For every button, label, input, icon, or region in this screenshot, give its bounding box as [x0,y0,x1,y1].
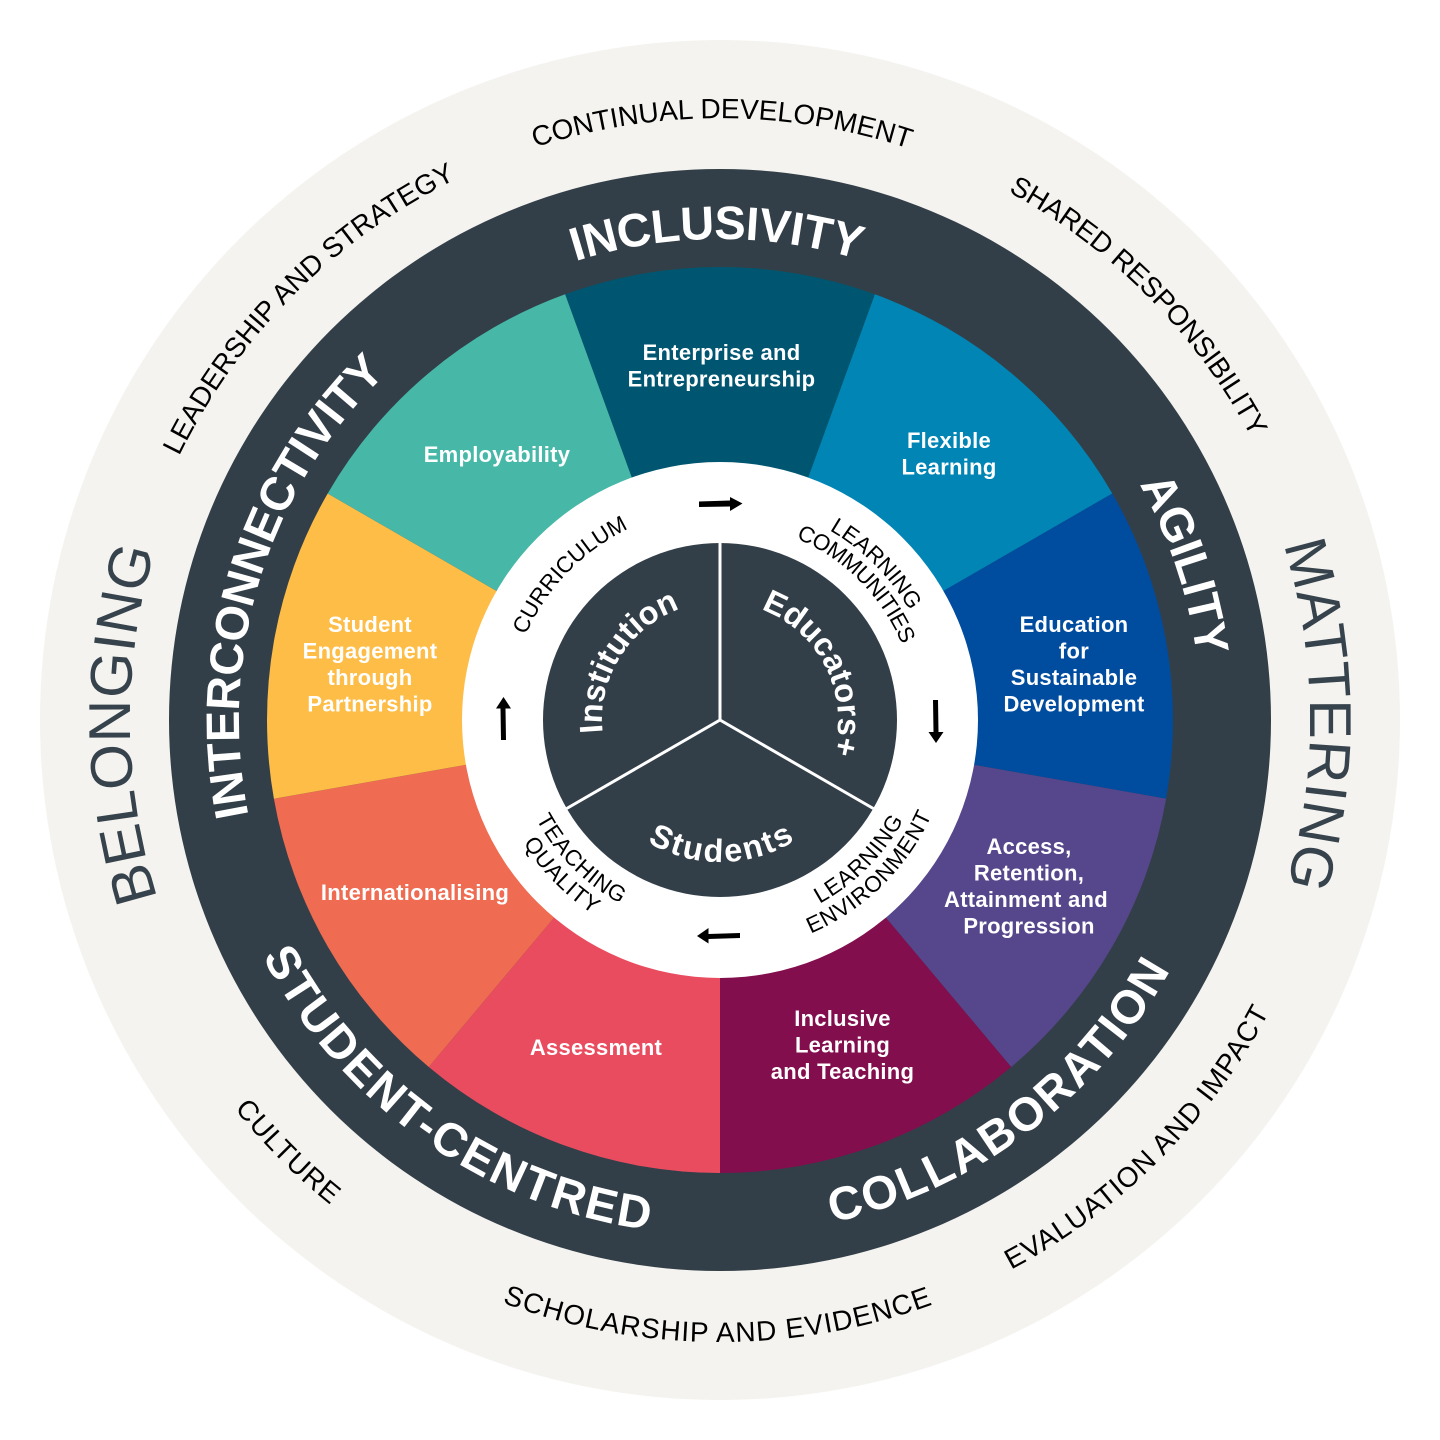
segment: student engagement through partnership: Student [328,612,412,637]
ring label: learning communities: COMMUNITIES [799,526,914,642]
segment: inclusive learning and teaching: and Teaching [771,1059,914,1084]
label: belonging: BELONGING [89,547,156,904]
value: interconnectivity: INTERCONNECTIVITY [206,351,378,818]
segment: student engagement through partnership [267,494,720,799]
ring label: learning environment: LEARNING [814,816,901,903]
segment: access, retention, attainment and progression: Attainment and [944,887,1108,912]
segment: student engagement through partnership: through [328,665,412,690]
segment: employability: Employability [424,442,571,467]
segment: student engagement through partnership: Partnership [307,692,433,716]
segment: student engagement through partnership: Engagement [303,638,438,664]
segment: education for sustainable development: Development [1003,692,1145,716]
label: continual development: CONTINUAL DEVELOPMENT [532,98,914,146]
value: student-centred: STUDENT-CENTRED [266,946,650,1228]
segment: internationalising: Internationalising [321,880,509,905]
label: scholarship and evidence: SCHOLARSHIP AND EVIDENCE [504,1286,932,1342]
arrow: bottom [697,928,740,944]
arrow: left [496,697,511,740]
segment: education for sustainable development: Education [1020,612,1128,637]
segment: education for sustainable development: Sustainable [1011,665,1137,690]
dark ring: core values [169,169,1271,1271]
segment: assessment [429,720,720,1173]
segment: inclusive learning and teaching: Inclusive [794,1006,891,1031]
segment: inclusive learning and teaching [720,720,1011,1173]
ring label: curriculum: CURRICULUM [514,516,627,632]
segment: education for sustainable development: for [1059,638,1089,664]
arrow: top [699,497,742,511]
centre circle: three partners [543,543,897,897]
segment: flexible learning: Learning [901,454,997,480]
label: culture: CULTURE [238,1100,342,1204]
colour wheel: nine themed segments [267,267,1173,1173]
arrow: right [928,700,944,743]
label: evaluation and impact: EVALUATION AND IMPACT [1004,1003,1266,1269]
value: collaboration: COLLABORATION [830,956,1169,1220]
ring label: teaching quality: TEACHING [539,812,625,901]
segment: enterprise and entrepreneurship [565,267,875,720]
partner: institution: Institution [580,595,678,732]
white ring: cycle of enablers [462,462,978,978]
partner: students: Students [650,825,792,862]
segment: assessment: Assessment [530,1035,663,1060]
segment: access, retention, attainment and progression: Retention, [974,860,1084,886]
segment: inclusive learning and teaching: Learning [795,1032,890,1058]
segment: flexible learning: Flexible [907,428,991,453]
segment: access, retention, attainment and progression [720,720,1166,1067]
partner: educators+: Educators+ [763,590,856,756]
label: shared responsibility: SHARED RESPONSIBILITY [1011,178,1268,430]
ring label: teaching quality: QUALITY [526,838,602,910]
value: inclusivity: INCLUSIVITY [569,206,866,260]
value: agility: AGILITY [1140,480,1229,650]
segment: education for sustainable development [720,494,1173,799]
ring label: learning communities: LEARNING [831,518,920,608]
segment: flexible learning [720,294,1112,720]
label: mattering: MATTERING [1285,538,1351,888]
segment: employability [328,294,720,720]
segment: internationalising [274,720,720,1067]
segment: access, retention, attainment and progression: Progression [963,914,1095,938]
segment: enterprise and entrepreneurship: Enterprise and [643,340,800,365]
label: leadership and strategy: LEADERSHIP AND STRATEGY [162,162,449,454]
segment: access, retention, attainment and progression: Access, [986,834,1072,859]
ring label: learning environment: ENVIRONMENT [806,808,930,933]
segment: enterprise and entrepreneurship: Entrepreneurship [628,366,815,392]
